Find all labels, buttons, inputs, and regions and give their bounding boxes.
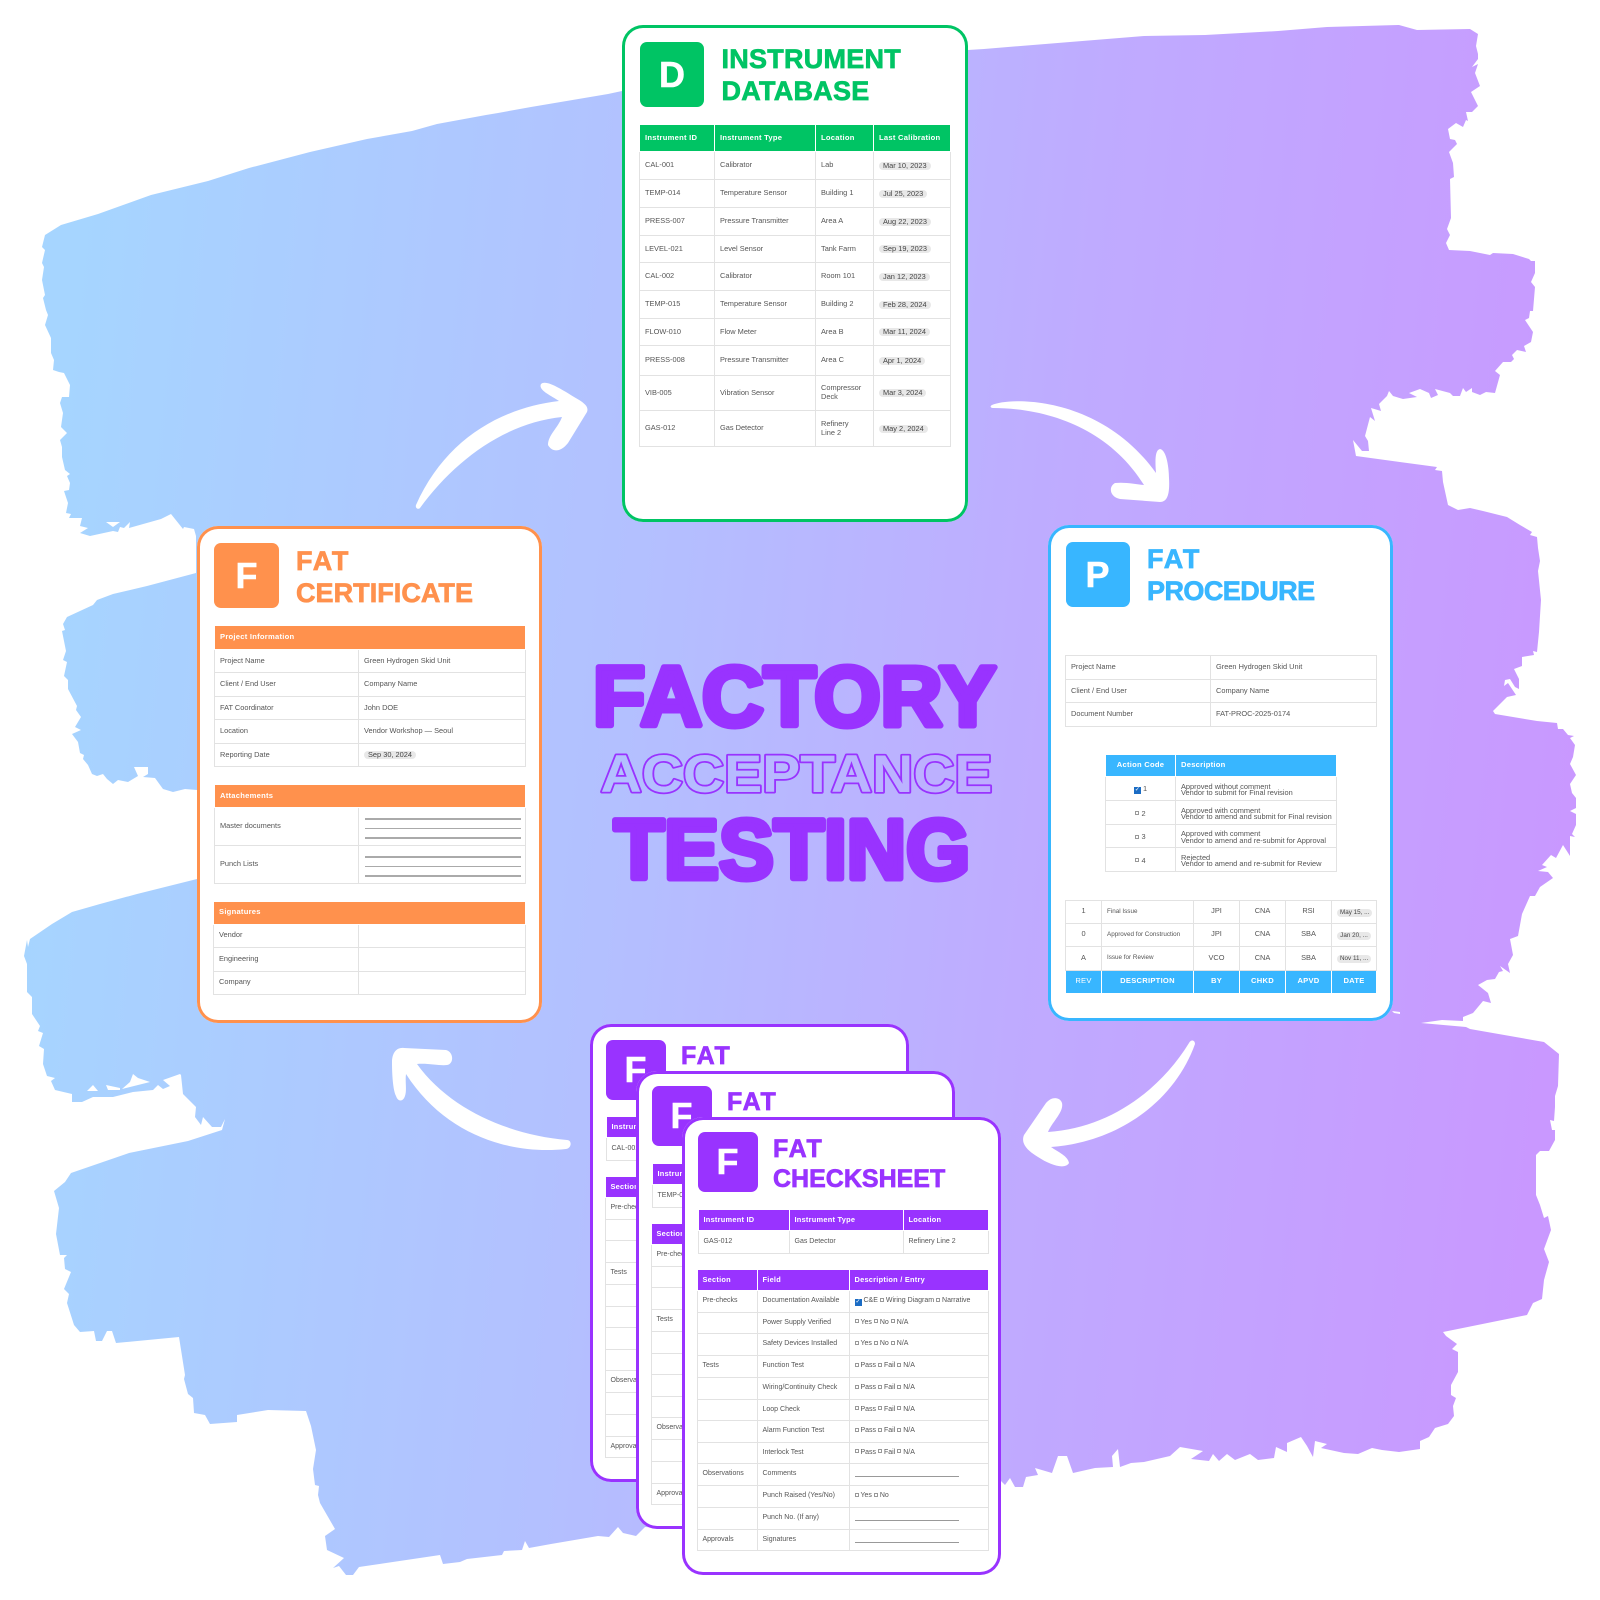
icon: F badge front: F: [716, 1141, 738, 1182]
table: instrument list: Room 101: [821, 271, 855, 280]
table: instrument list: CAL-002: [645, 271, 674, 280]
table: revision block: REV: [1075, 976, 1092, 985]
panel: FAT certificate: [197, 526, 542, 1023]
table: check items: Power Supply Verified: [762, 1319, 831, 1326]
heading: FAT checksheet: FAT: [773, 1134, 823, 1162]
heading: FAT middle: FAT: [727, 1088, 777, 1116]
table: revision block: VCO: [1208, 953, 1224, 962]
table: action codes: 3: [1141, 832, 1146, 841]
table: instrument list: Temperature Sensor: [720, 188, 787, 197]
table: revision block: RSI: [1302, 906, 1315, 915]
table: instrument list: Instrument ID: [645, 133, 697, 142]
table: check items: Pre-checks: [702, 1297, 738, 1304]
table: revision block: CNA: [1255, 953, 1270, 962]
table: instrument list: Last Calibration: [879, 133, 940, 142]
table: checks back: Approvals: [610, 1443, 642, 1450]
table: check items: Yes No: [860, 1492, 889, 1499]
table: revision block: Issue for Review: [1107, 954, 1154, 961]
table: instrument list: Aug 22, 2023: [883, 217, 927, 226]
table: revision block: Final Issue: [1107, 908, 1137, 915]
table: revision block: APVD: [1297, 976, 1320, 985]
table: instrument info: Refinery Line 2: [908, 1238, 956, 1245]
table: instrument list: Refinery: [821, 419, 849, 428]
panel: FAT checksheet back copy: [590, 1024, 909, 1482]
table: revision block: JPI: [1211, 906, 1222, 915]
table: check items: Approvals: [702, 1536, 734, 1543]
arrow: certificate to database: [416, 383, 587, 509]
table: instrument list: Building 2: [821, 299, 853, 308]
table: instrument list: Gas Detector: [720, 423, 764, 432]
table: instrument middle: [652, 1163, 742, 1208]
table: project information: Location: [220, 726, 248, 735]
heading: FAT procedure: PROCEDURE: [1147, 576, 1315, 606]
table: revision block: JPI: [1211, 929, 1222, 938]
table: checks middle: Section: [656, 1229, 685, 1238]
table: check items: Documentation Available: [762, 1297, 839, 1304]
table: instrument list: Area A: [821, 216, 843, 225]
table: action codes: 2: [1141, 809, 1146, 818]
table: check items: Pass Fail N/A: [860, 1406, 915, 1413]
table: check items: Comments: [762, 1470, 796, 1477]
table: instrument info: GAS-012: [704, 1238, 732, 1245]
heading: instrument database: INSTRUMENT: [722, 44, 901, 74]
table: instrument list: Instrument Type: [720, 133, 782, 142]
table: revision block: Approved for Construction: [1107, 931, 1180, 938]
table: action codes: Approved with comment: [1181, 806, 1260, 814]
table: instrument list: Vibration Sensor: [720, 388, 775, 397]
table: action codes: Rejected: [1181, 852, 1210, 862]
table: instrument list: TEMP-014: [645, 188, 680, 197]
table: instrument info: Instrument Type: [794, 1215, 855, 1224]
table: instrument list: Pressure Transmitter: [720, 355, 789, 364]
table: instrument list: PRESS-007: [645, 216, 685, 225]
table: instrument list: FLOW-010: [645, 327, 681, 336]
table: action codes: ✓: [1135, 787, 1140, 793]
table: instrument info: Gas Detector: [794, 1238, 836, 1245]
table: revision block: BY: [1211, 976, 1222, 985]
table: project details: Green Hydrogen Skid Unit: [1216, 662, 1302, 671]
table: checks middle: Tests: [656, 1316, 673, 1323]
table: action codes: 4: [1141, 856, 1146, 865]
table: check items: Punch No. (If any): [762, 1514, 819, 1521]
icon: P badge: [1066, 542, 1130, 607]
table: project information: Project Name: [220, 656, 265, 665]
table: check items: Pass Fail N/A: [860, 1427, 915, 1434]
heading: FAT certificate: FAT: [296, 546, 350, 576]
table: revision block: A: [1081, 953, 1086, 962]
table: action codes: Vendor to amend and re-submit for Approval: [1181, 836, 1326, 844]
table: revision block: May 15, ...: [1340, 908, 1369, 916]
table: action codes: Approved with comment: [1181, 829, 1260, 838]
table: instrument list: Compressor: [821, 383, 861, 392]
table: check items: Description / Entry: [854, 1275, 925, 1284]
table: project details: Client / End User: [1071, 686, 1127, 695]
icon: D badge: D: [659, 54, 685, 95]
heading: FAT certificate: CERTIFICATE: [296, 578, 473, 608]
table: signatures: Signatures: [219, 907, 261, 916]
table: action codes: Action Code: [1117, 760, 1164, 769]
icon: P badge: P: [1085, 554, 1110, 595]
table: instrument info: Instrument ID: [704, 1215, 754, 1224]
table: instrument list: CAL-001: [645, 160, 674, 169]
table: attachments: [214, 784, 526, 884]
table: project details: Project Name: [1071, 662, 1116, 671]
table: instrument list: GAS-012: [645, 423, 675, 432]
table: instrument back: Instrument ID: [612, 1122, 662, 1131]
table: project information: Vendor Workshop — Seoul: [364, 726, 453, 735]
table: instrument list: Apr 1, 2024: [883, 356, 921, 365]
table: instrument list: Mar 10, 2023: [883, 161, 927, 170]
table: project information: Company Name: [364, 679, 417, 688]
table: action codes: Vendor to amend and re-submit for Review: [1181, 859, 1322, 868]
table: check items: Signatures: [762, 1536, 796, 1543]
table: revision block: 1: [1081, 906, 1086, 915]
table: instrument list: [639, 124, 951, 447]
table: instrument list: May 2, 2024: [883, 424, 924, 433]
table: checks back: Section: [610, 1182, 639, 1191]
table: instrument middle: Instrument ID: [658, 1169, 708, 1178]
table: revision block: 0: [1081, 929, 1086, 938]
title: FACTORY: [593, 650, 996, 744]
table: instrument back: CAL-001: [612, 1145, 639, 1152]
table: instrument list: Temperature Sensor: [720, 299, 787, 308]
table: project information: Sep 30, 2024: [368, 750, 412, 759]
table: instrument middle: TEMP-014: [658, 1192, 691, 1199]
table: signatures: Vendor: [219, 930, 242, 939]
table: instrument list: Mar 11, 2024: [883, 327, 926, 336]
table: instrument list: Calibrator: [720, 160, 752, 169]
table: instrument list: Location: [821, 133, 855, 142]
table: action codes: 1: [1143, 784, 1147, 793]
table: check items: Interlock Test: [762, 1449, 804, 1456]
table: check items: Function Test: [762, 1362, 804, 1369]
table: instrument list: Lab: [821, 160, 833, 169]
table: instrument list: Building 1: [821, 188, 853, 197]
table: check items: Yes No N/A: [860, 1340, 908, 1347]
table: checks back: Tests: [610, 1269, 627, 1276]
table: attachments: Attachements: [220, 791, 273, 800]
table: instrument list: Area C: [821, 355, 844, 364]
table: check items: Pass Fail N/A: [860, 1449, 915, 1456]
table: check items: [696, 1269, 988, 1551]
table: instrument list: Pressure Transmitter: [720, 216, 789, 225]
table: instrument list: TEMP-015: [645, 299, 680, 308]
table: check items: ✓: [855, 1299, 861, 1305]
table: instrument list: Jan 12, 2023: [883, 272, 926, 281]
table: instrument list: Flow Meter: [720, 327, 757, 336]
table: check items: Tests: [702, 1362, 719, 1369]
table: revision block: Jan 20, ...: [1340, 932, 1368, 938]
table: project details: FAT-PROC-2025-0174: [1216, 709, 1290, 718]
heading: FAT procedure: [1147, 544, 1315, 606]
icon: F badge back: F: [624, 1048, 646, 1090]
table: action codes: Vendor to amend and submit for Final revision: [1181, 812, 1332, 821]
table: check items: Field: [762, 1275, 781, 1284]
table: checks middle: [650, 1223, 710, 1505]
table: checks back: Pre-checks: [610, 1204, 646, 1211]
table: attachments: Punch Lists: [220, 859, 258, 868]
table: instrument list: VIB-005: [645, 388, 672, 397]
table: instrument list: Feb 28, 2024: [883, 300, 927, 309]
table: instrument info: Location: [908, 1215, 941, 1224]
table: revision block: [1065, 900, 1377, 994]
table: revision block: CNA: [1255, 906, 1270, 915]
table: instrument list: Deck: [821, 392, 838, 401]
table: project information: Project Information: [220, 632, 294, 641]
table: action codes: [1105, 754, 1337, 872]
table: action codes: Description: [1181, 760, 1226, 769]
table: checks back: [604, 1176, 664, 1458]
table: project information: Client / End User: [220, 679, 276, 688]
panel: instrument database: [622, 25, 968, 522]
table: revision block: CNA: [1255, 929, 1270, 938]
table: checks middle: Pre-checks: [656, 1251, 692, 1258]
icon: F badge middle: [652, 1086, 712, 1146]
heading: FAT certificate: [296, 546, 473, 608]
title: ACCEPTANCE: [600, 745, 992, 804]
table: project information: John DOE: [364, 703, 398, 712]
table: project information: Green Hydrogen Skid Unit: [364, 656, 450, 665]
table: attachments: Master documents: [220, 821, 281, 830]
table: checks back: Observations: [610, 1377, 652, 1384]
panel: FAT checksheet middle copy: [636, 1071, 955, 1529]
icon: F badge middle: F: [670, 1095, 692, 1136]
icon: F badge: F: [236, 555, 258, 596]
table: revision block: DESCRIPTION: [1120, 976, 1175, 985]
table: action codes: Approved without comment: [1181, 782, 1271, 790]
table: project information: FAT Coordinator: [220, 703, 274, 712]
table: revision block: SBA: [1301, 953, 1316, 962]
table: project details: [1065, 655, 1377, 727]
heading: FAT back: FAT: [681, 1042, 731, 1070]
table: project details: Company Name: [1216, 686, 1269, 695]
icon: F badge back: [606, 1040, 666, 1100]
table: instrument list: Level Sensor: [720, 244, 763, 253]
table: signatures: Company: [219, 977, 251, 986]
table: instrument list: Line 2: [821, 428, 841, 436]
icon: F badge front: [698, 1132, 758, 1192]
table: instrument list: LEVEL-021: [645, 244, 683, 253]
table: checks middle: Observations: [656, 1424, 698, 1431]
table: project details: Document Number: [1071, 709, 1133, 718]
table: project information: [214, 625, 526, 767]
table: instrument info: [698, 1209, 988, 1254]
panel: FAT procedure: [1048, 525, 1393, 1021]
table: revision block: CHKD: [1251, 976, 1274, 985]
icon: F badge: [214, 543, 279, 608]
heading: FAT procedure: FAT: [1147, 544, 1201, 574]
panel: FAT checksheet front: [682, 1117, 1001, 1575]
heading: FAT checksheet: [773, 1134, 946, 1192]
heading: instrument database: DATABASE: [722, 76, 870, 106]
table: revision block: SBA: [1301, 929, 1316, 938]
table: revision block: Nov 11, ...: [1340, 955, 1368, 962]
title: TESTING: [614, 802, 970, 896]
table: check items: Observations: [702, 1470, 744, 1477]
arrow: database to procedure: [991, 401, 1169, 502]
table: instrument list: PRESS-008: [645, 355, 685, 364]
table: instrument list: Mar 3, 2024: [883, 388, 922, 397]
table: check items: C&E Wiring Diagram Narrative: [864, 1297, 970, 1304]
table: check items: Alarm Function Test: [762, 1427, 824, 1434]
table: instrument list: Sep 19, 2023: [883, 244, 927, 253]
table: instrument list: Area B: [821, 327, 844, 336]
icon: D badge: [640, 42, 704, 107]
arrow: procedure to checksheet: [1023, 1040, 1195, 1166]
table: check items: Pass Fail N/A: [860, 1362, 915, 1369]
table: checks middle: Approvals: [656, 1490, 688, 1497]
heading: FAT checksheet: CHECKSHEET: [773, 1164, 945, 1192]
table: signatures: Engineering: [219, 954, 258, 963]
arrow: checksheet to certificate: [392, 1048, 571, 1150]
table: check items: Loop Check: [762, 1406, 800, 1413]
table: project information: Reporting Date: [220, 750, 270, 759]
table: revision block: DATE: [1343, 976, 1365, 985]
table: instrument list: Jul 25, 2023: [883, 189, 923, 198]
title: [593, 650, 996, 896]
table: check items: Section: [702, 1275, 731, 1284]
table: action codes: Vendor to submit for Final revision: [1181, 788, 1293, 797]
table: instrument list: Calibrator: [720, 271, 752, 280]
table: check items: Yes No N/A: [860, 1319, 908, 1326]
table: check items: Punch Raised (Yes/No): [762, 1492, 835, 1499]
table: check items: Pass Fail N/A: [860, 1384, 915, 1391]
table: signatures: [213, 900, 526, 994]
heading: instrument database: [722, 44, 901, 106]
table: instrument back: [606, 1116, 696, 1161]
table: check items: Wiring/Continuity Check: [762, 1384, 837, 1391]
table: check items: Safety Devices Installed: [762, 1340, 837, 1347]
table: instrument list: Tank Farm: [821, 244, 856, 253]
